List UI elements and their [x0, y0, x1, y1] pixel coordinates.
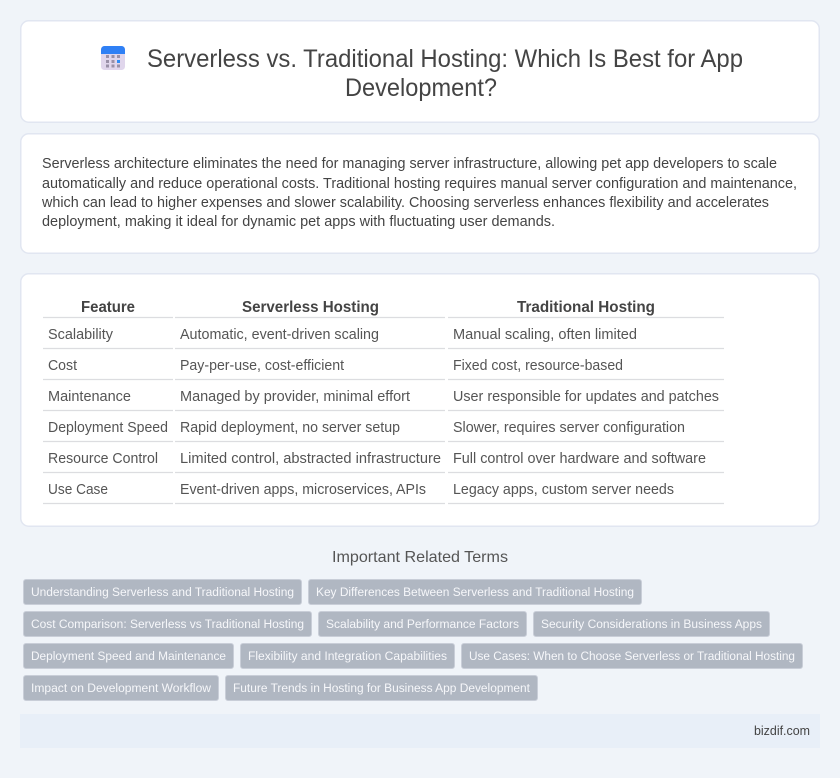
- table row: use case: [48, 482, 674, 498]
- icon: calendar: [101, 46, 125, 70]
- tag: Key Differences Between Serverless and Traditional Hosting: [316, 585, 634, 599]
- tag: Use Cases: When to Choose Serverless or Traditional Hosting: [469, 649, 795, 663]
- text block: introduction paragraph: Serverless architecture eliminates the need for managing server infrastructure, allowing pet app developers to scale: [42, 156, 777, 172]
- tag: [318, 612, 526, 636]
- tag: [24, 676, 218, 700]
- tag: [24, 644, 234, 668]
- table row: scalability: Manual scaling, often limited: [453, 327, 637, 343]
- panel: introduction: [21, 134, 819, 253]
- table row: maintenance: [48, 389, 719, 405]
- tag: [226, 676, 538, 700]
- table row: scalability: Automatic, event-driven scaling: [180, 327, 379, 343]
- tag: Understanding Serverless and Traditional Hosting: [31, 585, 294, 599]
- tag: [308, 580, 642, 604]
- tag: [24, 612, 312, 636]
- table header row: Feature: [81, 299, 135, 316]
- table row: resource control: Resource Control: [48, 451, 158, 467]
- table row: maintenance: Maintenance: [48, 389, 131, 405]
- panel: header: [21, 21, 819, 122]
- heading: important related terms: Important Related Terms: [332, 549, 508, 566]
- tag: [24, 580, 302, 604]
- title: [147, 45, 743, 102]
- table row: deployment speed: Deployment Speed: [48, 420, 168, 436]
- table row: resource control: [48, 451, 706, 467]
- tag: [240, 644, 454, 668]
- table row: deployment speed: Rapid deployment, no server setup: [180, 420, 400, 436]
- tag: Cost Comparison: Serverless vs Traditional Hosting: [31, 617, 304, 631]
- tag: [534, 612, 770, 636]
- title: Development?: [345, 74, 497, 102]
- tag: Flexibility and Integration Capabilities: [248, 649, 447, 663]
- title: Serverless vs. Traditional Hosting: Which Is Best for App: [147, 45, 743, 73]
- text block: introduction paragraph: automatically and reduce operational costs. Traditional hosting requires manual server configuration and maintenance,: [42, 176, 797, 192]
- table header row: [81, 299, 655, 316]
- text block: introduction paragraph: [41, 156, 797, 230]
- footer credit: bizdif.com: [754, 724, 810, 738]
- table row: use case: Use Case: [48, 482, 108, 498]
- table row: resource control: Full control over hardware and software: [453, 451, 706, 467]
- table row: use case: Event-driven apps, microservices, APIs: [180, 482, 426, 498]
- table row: resource control: Limited control, abstracted infrastructure: [180, 451, 441, 467]
- table row: maintenance: User responsible for updates and patches: [453, 389, 719, 405]
- footer: [20, 714, 820, 748]
- table header row: Traditional Hosting: [517, 299, 655, 316]
- tag: Scalability and Performance Factors: [326, 617, 519, 631]
- tag: Impact on Development Workflow: [31, 681, 211, 695]
- tag: Future Trends in Hosting for Business App Development: [233, 681, 531, 695]
- tag list: related terms: [24, 580, 802, 700]
- table row: scalability: [48, 327, 637, 343]
- table row: use case: Legacy apps, custom server needs: [453, 482, 674, 498]
- text block: introduction paragraph: which can lead to higher expenses and slower scalability. Choosing serverless enhances flexibility and accelerates: [41, 195, 769, 211]
- tag: Deployment Speed and Maintenance: [31, 649, 226, 663]
- table row: cost: [48, 358, 623, 374]
- table row: cost: Fixed cost, resource-based: [453, 358, 623, 374]
- tag: [462, 644, 802, 668]
- table row: deployment speed: Slower, requires server configuration: [453, 420, 685, 436]
- panel: comparison table: [21, 274, 819, 526]
- text block: introduction paragraph: deployment, making it ideal for dynamic pet apps with fluctuating user demands.: [42, 214, 555, 230]
- table row: cost: Cost: [48, 358, 77, 374]
- table row: deployment speed: [48, 420, 685, 436]
- table header row: Serverless Hosting: [242, 299, 379, 316]
- table row: maintenance: Managed by provider, minimal effort: [180, 389, 410, 405]
- table row: scalability: Scalability: [48, 327, 114, 343]
- tag: Security Considerations in Business Apps: [541, 617, 762, 631]
- table row: cost: Pay-per-use, cost-efficient: [180, 358, 344, 374]
